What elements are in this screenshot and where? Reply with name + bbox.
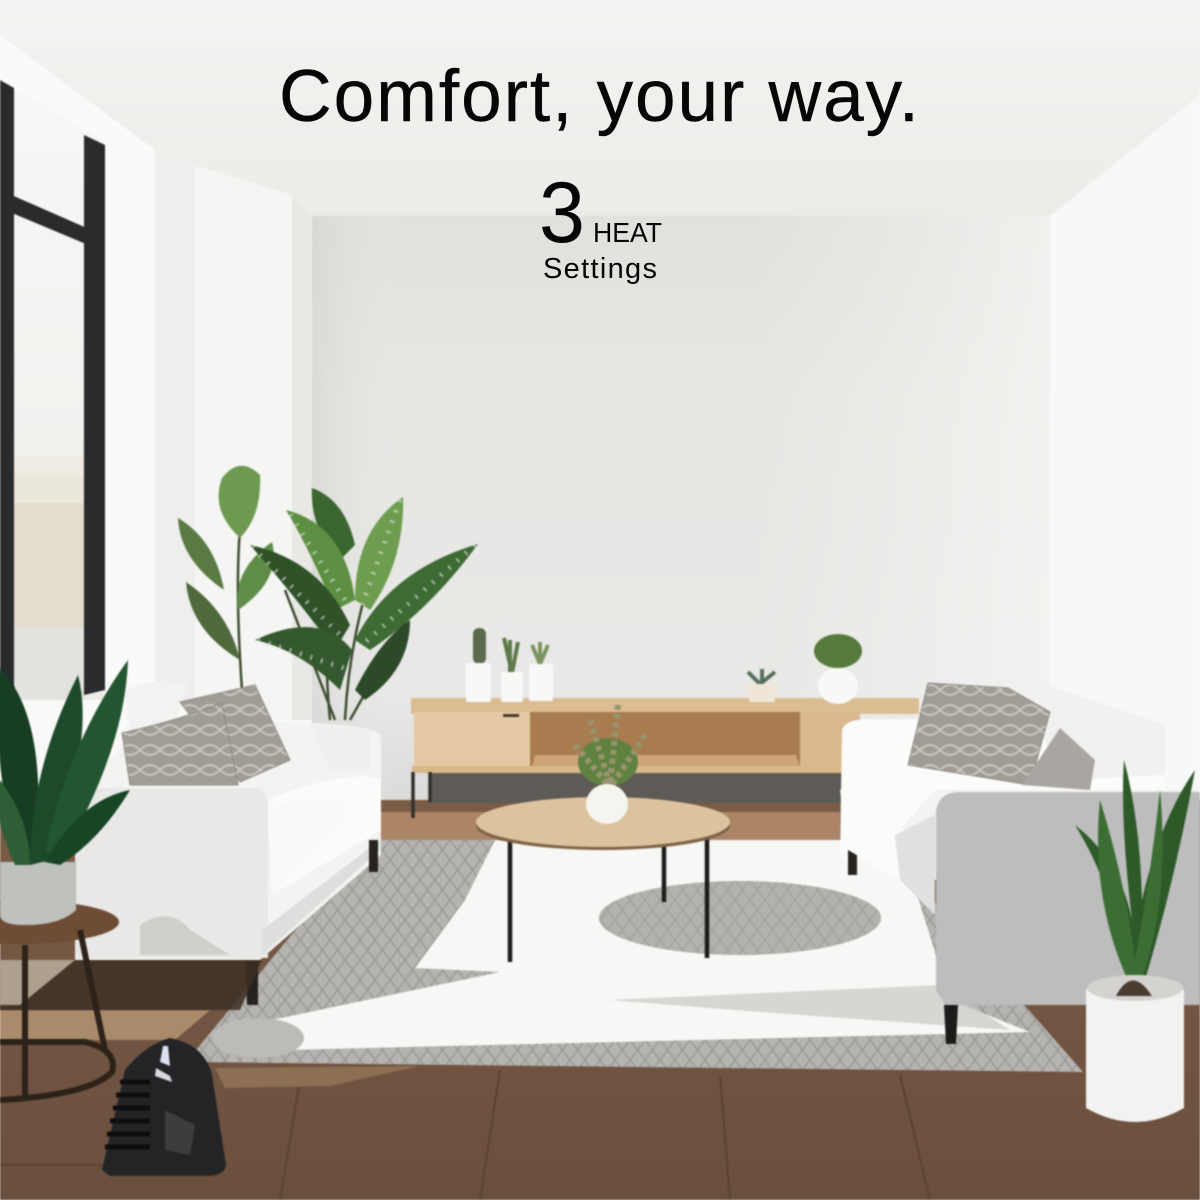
front-left plant and side table bbox=[0, 660, 130, 1100]
pillow bbox=[180, 685, 290, 782]
number 3: 3 bbox=[539, 165, 585, 261]
title: Comfort, your way. bbox=[279, 56, 919, 137]
centre plant bbox=[575, 705, 645, 824]
pillow bbox=[1022, 728, 1095, 790]
console table bbox=[411, 698, 919, 818]
heater bbox=[102, 1038, 226, 1176]
front-right plant bbox=[1075, 760, 1195, 1122]
left sofa bbox=[0, 681, 381, 1010]
shelf plants bbox=[466, 628, 862, 704]
heat settings label bbox=[539, 165, 662, 285]
floor bbox=[0, 800, 1200, 1200]
pillow bbox=[122, 703, 238, 785]
large plants bbox=[178, 466, 478, 720]
Settings: Settings bbox=[543, 253, 657, 285]
window bbox=[0, 80, 105, 700]
pillow bbox=[908, 683, 1050, 785]
right sofa bbox=[840, 676, 1200, 1044]
HEAT: HEAT bbox=[593, 217, 662, 248]
coffee table bbox=[476, 797, 730, 962]
rug bbox=[186, 840, 1083, 1072]
